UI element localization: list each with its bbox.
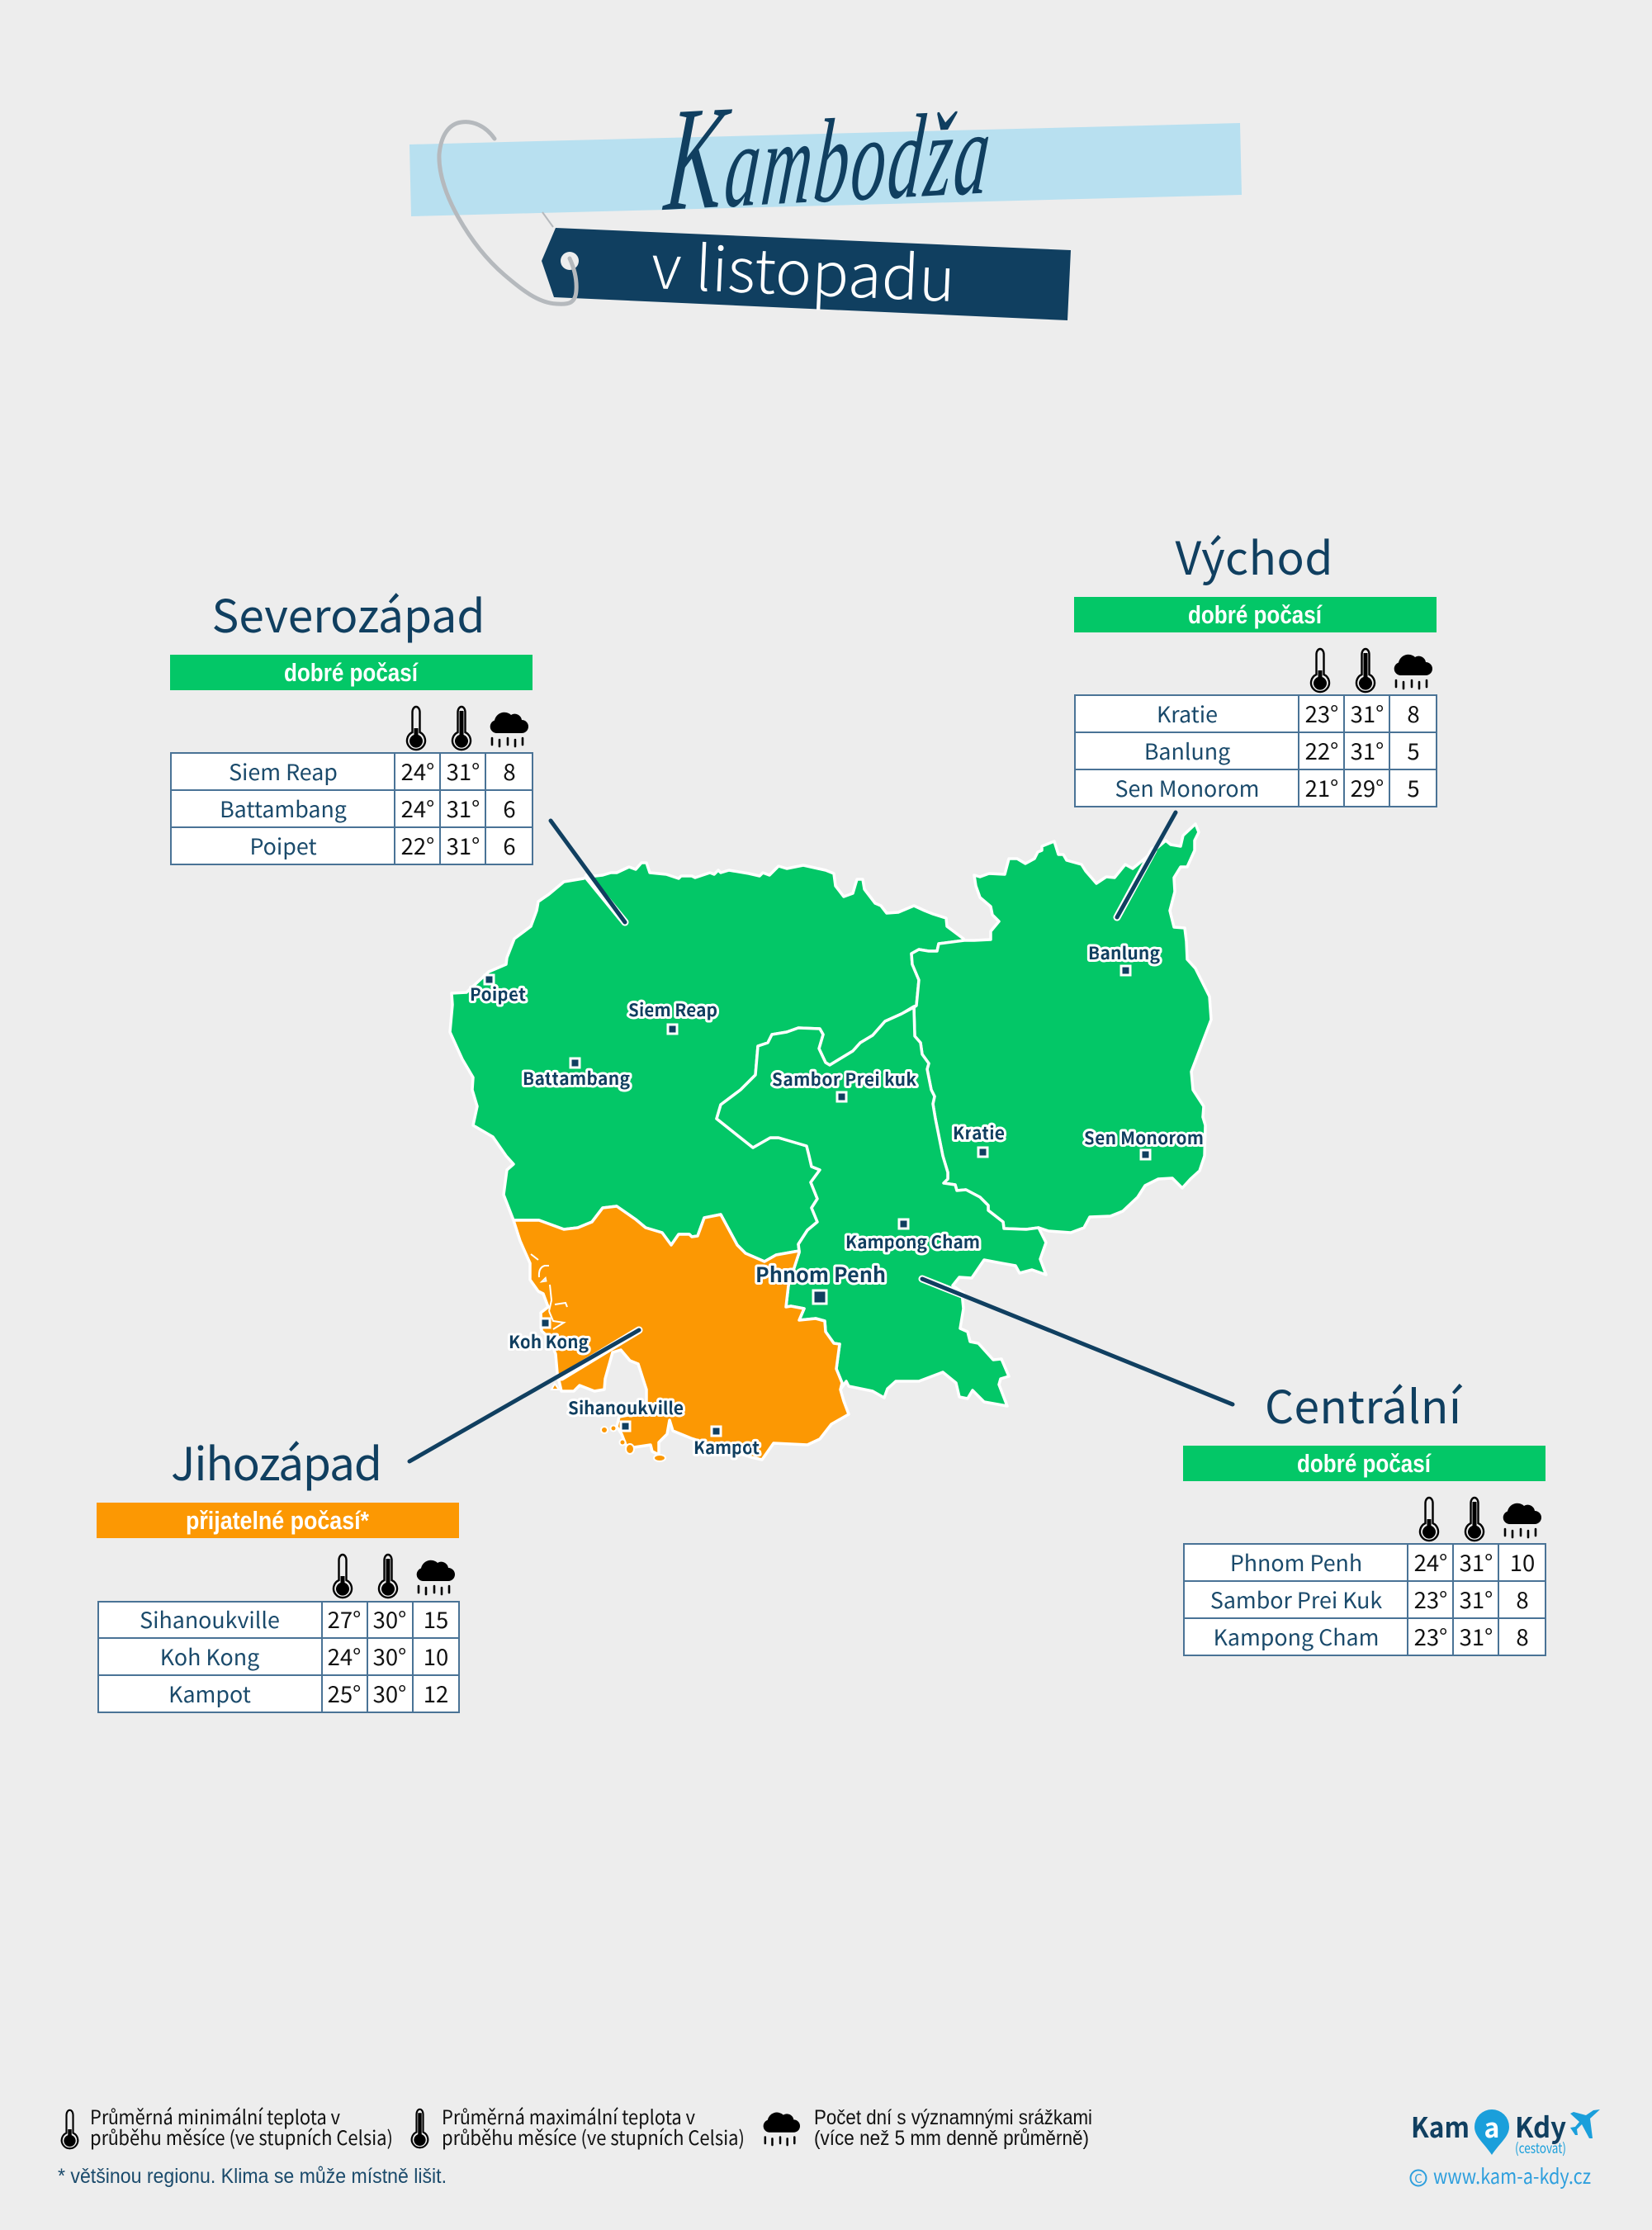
icon: rain xyxy=(490,713,528,746)
heading: Centrální xyxy=(1265,1371,1463,1437)
tag string loop xyxy=(439,122,576,304)
legend text: max temperature xyxy=(442,2101,745,2151)
table: 30° xyxy=(373,1602,406,1635)
icon: location pin: a xyxy=(1484,2108,1499,2146)
table: Siem Reap xyxy=(229,755,338,787)
legend text: rain: (více než 5 mm denně průměrně) xyxy=(814,2127,1089,2150)
table: 31° xyxy=(1460,1545,1493,1578)
rating bar xyxy=(1074,597,1437,632)
table: 5 xyxy=(1407,770,1420,803)
icon: rain xyxy=(1394,655,1432,689)
icon: legend rain xyxy=(764,2113,800,2145)
heading: Jihozápad xyxy=(171,1427,382,1494)
table: Koh Kong xyxy=(160,1640,259,1672)
Koh Kong inlets and islands xyxy=(531,1254,665,1461)
website: www.kam-a-kdy.cz xyxy=(1433,2161,1591,2190)
table: Kratie xyxy=(1157,697,1218,729)
icon: min temperature xyxy=(1311,649,1329,692)
table: 5 xyxy=(1407,733,1420,766)
table: Sen Monorom xyxy=(1115,771,1259,803)
table: Sambor Prei Kuk xyxy=(1210,1583,1382,1615)
table: 8 xyxy=(1516,1619,1529,1652)
subtitle: v listopadu: v listopadu xyxy=(650,218,957,320)
table: Phnom Penh xyxy=(1230,1546,1362,1578)
table: 31° xyxy=(447,828,480,861)
icon: rain xyxy=(417,1560,455,1594)
table xyxy=(171,753,533,864)
legend text: max temperature: průběhu měsíce (ve stupních Celsia) xyxy=(442,2122,745,2151)
city: Phnom Penh: Phnom Penh xyxy=(755,1259,886,1289)
light blue title band xyxy=(409,123,1242,216)
icon: plane xyxy=(1570,2109,1600,2138)
panel: Severozápad xyxy=(170,580,533,864)
logo word Kdy: Kdy xyxy=(1515,2105,1566,2146)
leader line: Jihozápad xyxy=(409,1330,639,1461)
icon: max temperature xyxy=(1465,1498,1484,1541)
panel: Východ xyxy=(1074,522,1437,807)
icon: min temperature xyxy=(1420,1498,1438,1541)
legend text: min temperature: Průměrná minimální teplota v xyxy=(90,2101,340,2130)
table: 27° xyxy=(328,1602,361,1635)
table: 24° xyxy=(401,754,434,787)
legend text: min temperature xyxy=(90,2101,393,2151)
city: Poipet: Poipet xyxy=(470,982,526,1006)
city: Sen Monorom: Sen Monorom xyxy=(1084,1125,1204,1150)
logo word Kam: Kam xyxy=(1411,2105,1470,2146)
region: Jihozápad xyxy=(514,1206,849,1460)
table: 25° xyxy=(328,1676,361,1709)
table: 24° xyxy=(328,1639,361,1672)
city: Sambor Prei kuk: Sambor Prei kuk xyxy=(772,1067,916,1091)
rating bar: dobré počasí xyxy=(1188,600,1323,629)
table xyxy=(1075,695,1437,807)
legend xyxy=(58,2101,1092,2188)
logo subtitle: (cestovat) xyxy=(1515,2137,1566,2157)
icon: max temperature xyxy=(379,1555,397,1598)
table: 6 xyxy=(503,828,516,861)
city: Battambang: Battambang xyxy=(523,1066,630,1091)
table: 12 xyxy=(424,1676,448,1709)
rating bar xyxy=(170,655,533,690)
region: Východ xyxy=(911,824,1211,1233)
icon: max temperature xyxy=(452,707,471,750)
icon: legend max temperature xyxy=(412,2109,428,2147)
table xyxy=(98,1602,459,1712)
table: Banlung xyxy=(1144,734,1230,766)
leader line: Východ xyxy=(1117,812,1176,917)
city: Kampot: Kampot xyxy=(693,1435,760,1460)
rating bar: přijatelné počasí* xyxy=(186,1506,370,1535)
city: Koh Kong xyxy=(509,1319,589,1354)
icon: min temperature xyxy=(334,1555,352,1598)
city: Kratie xyxy=(953,1120,1005,1157)
table: 8 xyxy=(1407,696,1420,729)
city: Banlung: Banlung xyxy=(1088,940,1160,965)
table: 8 xyxy=(1516,1582,1529,1615)
table: Battambang xyxy=(220,792,347,824)
heading: Severozápad xyxy=(211,580,485,646)
table: 23° xyxy=(1414,1619,1447,1652)
table: 31° xyxy=(1351,696,1384,729)
table: 31° xyxy=(1351,733,1384,766)
rating bar xyxy=(97,1503,459,1538)
city: Phnom Penh xyxy=(755,1259,886,1304)
title block xyxy=(409,61,1242,320)
city: Siem Reap: Siem Reap xyxy=(628,997,717,1022)
panel: Centrální xyxy=(1183,1371,1545,1655)
table: 8 xyxy=(503,754,516,787)
city: Kampong Cham: Kampong Cham xyxy=(845,1229,980,1254)
footnote: * většinou regionu. Klima se může místně lišit. xyxy=(58,2165,447,2188)
city: Kratie: Kratie xyxy=(953,1120,1005,1145)
legend text: min temperature: průběhu měsíce (ve stupních Celsia) xyxy=(90,2122,393,2151)
rating bar xyxy=(1183,1446,1545,1481)
table: 30° xyxy=(373,1639,406,1672)
leader line: Severozápad xyxy=(551,821,625,922)
logo: Kam a Kdy xyxy=(1410,2105,1600,2190)
table: 23° xyxy=(1305,696,1338,729)
icon: min temperature xyxy=(407,707,425,750)
table: 31° xyxy=(447,791,480,824)
icon: rain xyxy=(1503,1503,1541,1537)
region: Severozápad xyxy=(450,863,964,1262)
icon: location pin xyxy=(1474,2108,1509,2155)
map of Cambodia xyxy=(409,812,1233,1461)
table: 10 xyxy=(424,1639,448,1672)
table: 10 xyxy=(1510,1545,1535,1578)
legend text: rain: Počet dní s významnými srážkami xyxy=(814,2106,1092,2129)
icon: legend min temperature xyxy=(62,2110,78,2148)
table: Kampong Cham xyxy=(1214,1620,1379,1652)
icon: max temperature xyxy=(1356,649,1375,692)
table: 31° xyxy=(1460,1582,1493,1615)
region: Centrální xyxy=(717,1007,1046,1406)
table: 31° xyxy=(447,754,480,787)
leader line: Centrální xyxy=(922,1279,1233,1404)
table: 24° xyxy=(401,791,434,824)
city: Sihanoukville xyxy=(568,1395,684,1431)
table: 29° xyxy=(1351,770,1384,803)
table: Kampot xyxy=(168,1677,251,1709)
rating bar: dobré počasí xyxy=(284,658,419,687)
panel: Jihozápad xyxy=(97,1427,459,1712)
city: Koh Kong: Koh Kong xyxy=(509,1329,589,1354)
table: 23° xyxy=(1414,1582,1447,1615)
heading: Východ xyxy=(1176,522,1332,588)
table xyxy=(1184,1544,1545,1655)
table: 15 xyxy=(424,1602,448,1635)
tag string back xyxy=(542,212,553,227)
legend text: max temperature: Průměrná maximální teplota v xyxy=(442,2101,695,2130)
table: 6 xyxy=(503,791,516,824)
table: Sihanoukville xyxy=(140,1603,280,1635)
title: Kambodža: Kambodža xyxy=(659,61,997,242)
table: 24° xyxy=(1414,1545,1447,1578)
city: Siem Reap xyxy=(628,997,717,1034)
legend text: rain xyxy=(814,2106,1092,2150)
table: 22° xyxy=(1305,733,1338,766)
table: 30° xyxy=(373,1676,406,1709)
table: 21° xyxy=(1305,770,1338,803)
table: 22° xyxy=(401,828,434,861)
table: 31° xyxy=(1460,1619,1493,1652)
table: Poipet xyxy=(249,829,317,861)
city: Sihanoukville: Sihanoukville xyxy=(568,1395,684,1420)
rating bar: dobré počasí xyxy=(1297,1449,1432,1478)
dark price tag xyxy=(542,228,1071,320)
website: C xyxy=(1414,2170,1422,2187)
